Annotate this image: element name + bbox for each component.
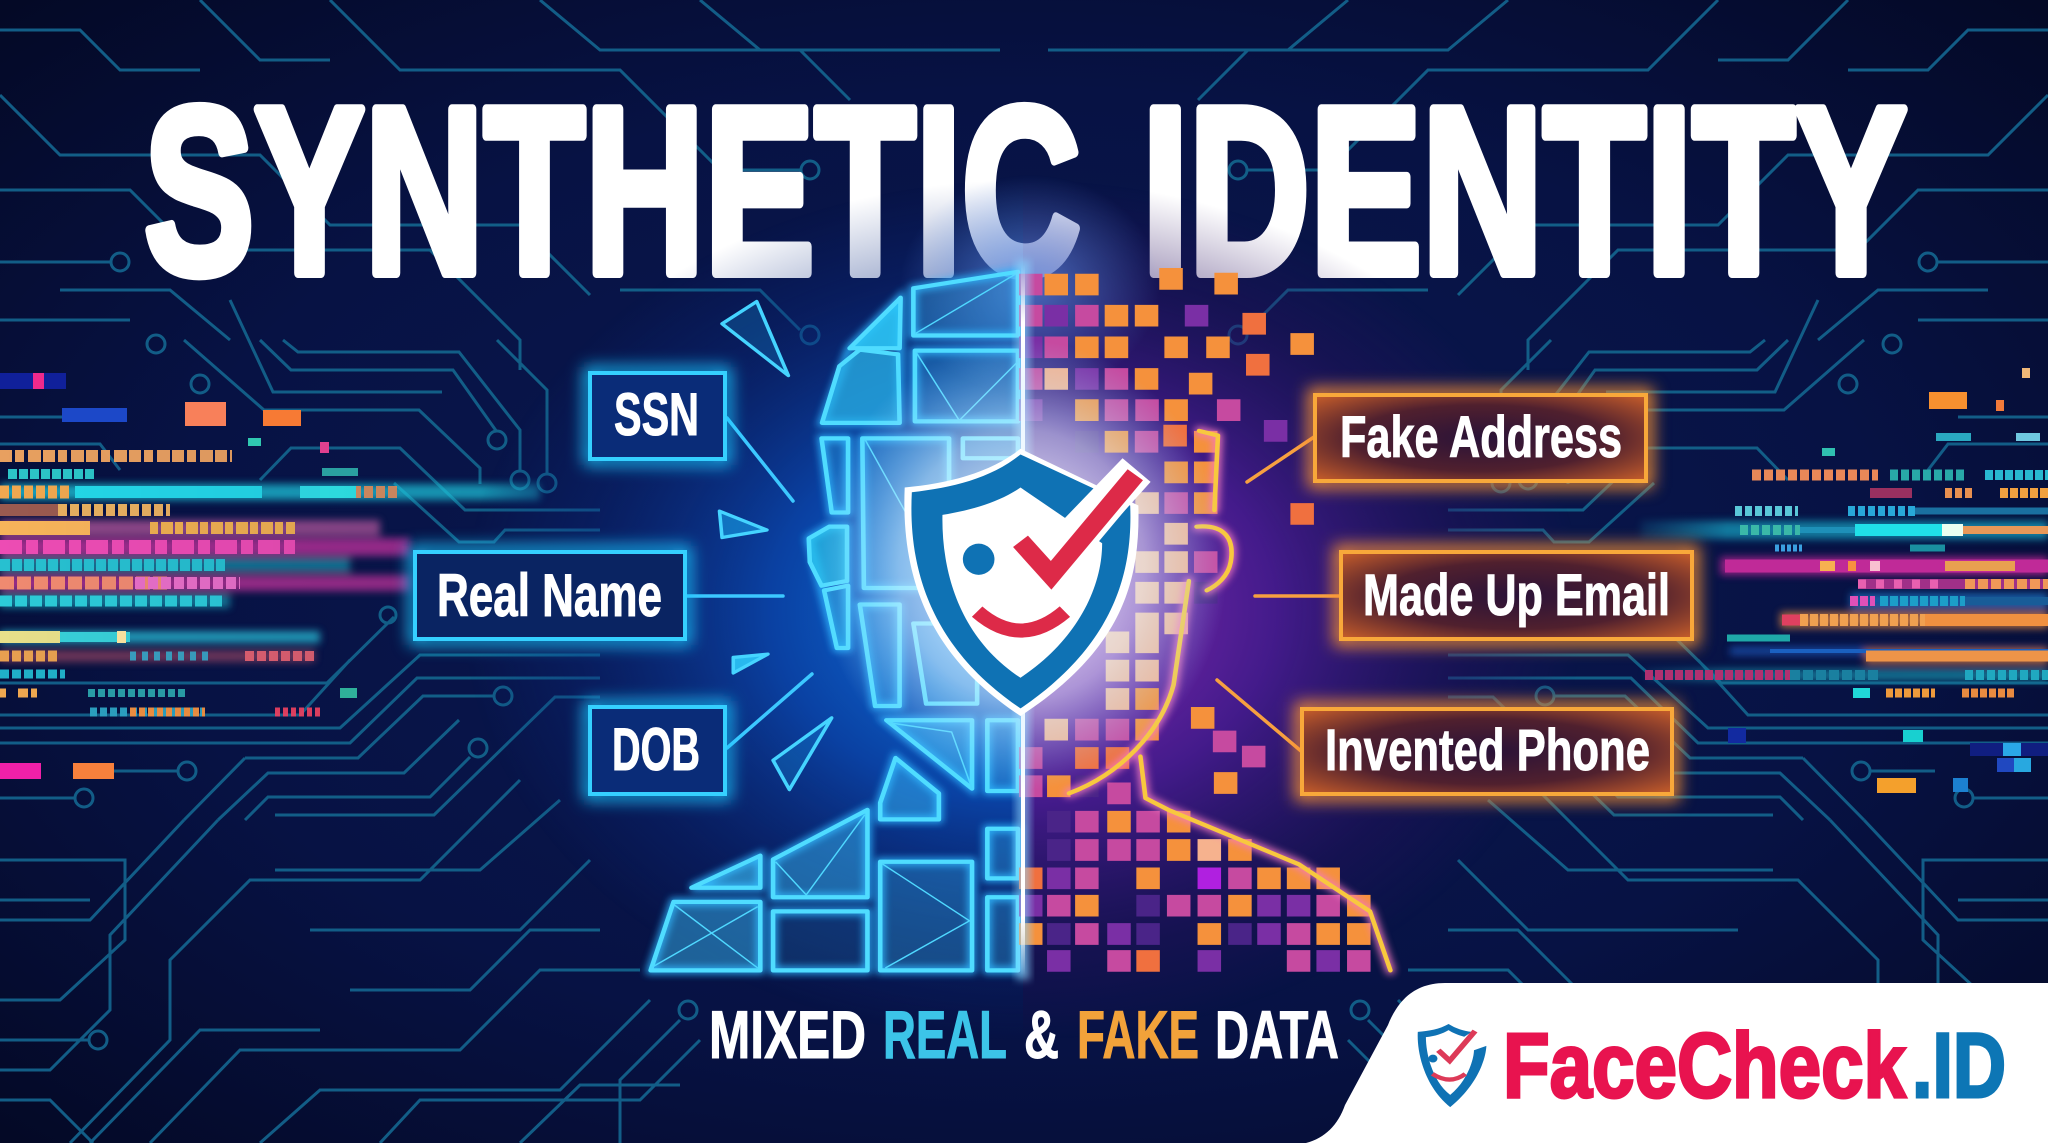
left data stream <box>0 373 540 779</box>
smile <box>977 612 1065 631</box>
label: Real Name: Real Name <box>437 562 662 629</box>
caption: mixed real and fake data: MIXED <box>709 997 866 1073</box>
logo: .ID <box>1912 1015 2006 1117</box>
label: Invented Phone <box>1301 708 1673 795</box>
icon: shield badge with smiling face and check <box>904 449 1151 716</box>
right data stream <box>1640 368 2048 793</box>
title glow overlay <box>900 175 1160 395</box>
label: Made Up Email: Made Up Email <box>1363 563 1670 628</box>
center divider line <box>1016 260 1030 980</box>
caption: mixed real and fake data: REAL <box>883 997 1007 1073</box>
floating shards <box>719 302 832 790</box>
portrait: faceted real half and pixel fake half <box>651 272 1390 970</box>
label: SSN: SSN <box>614 381 699 448</box>
label: SSN <box>589 372 726 460</box>
connector lines <box>687 418 1340 751</box>
yellow outline of fake half <box>1069 431 1390 970</box>
facet inner lines <box>651 274 1018 968</box>
label: Fake Address <box>1314 394 1647 482</box>
outer glow of real half <box>651 272 1018 970</box>
label: DOB: DOB <box>612 716 700 783</box>
eye <box>963 544 994 575</box>
shield glow <box>817 340 1227 790</box>
check mark <box>1021 475 1135 575</box>
title: SYNTHETIC <box>144 59 1081 324</box>
faceted panels <box>651 272 1018 970</box>
logo: FaceCheck <box>1503 1015 1907 1117</box>
label: Fake Address: Fake Address <box>1340 405 1622 470</box>
pixel squares <box>1031 279 1359 961</box>
logo panel <box>1306 983 2048 1143</box>
caption: mixed real and fake data: FAKE <box>1077 997 1199 1073</box>
central split glow <box>463 180 1583 1040</box>
label: DOB <box>589 706 726 795</box>
label: Made Up Email <box>1340 551 1693 640</box>
caption: mixed real and fake data <box>709 997 1339 1073</box>
label: Real Name <box>414 551 686 640</box>
icon: logo shield <box>1418 1024 1486 1107</box>
label: Invented Phone: Invented Phone <box>1325 718 1650 783</box>
caption: mixed real and fake data: DATA <box>1215 997 1339 1073</box>
caption: mixed real and fake data: & <box>1024 997 1059 1073</box>
